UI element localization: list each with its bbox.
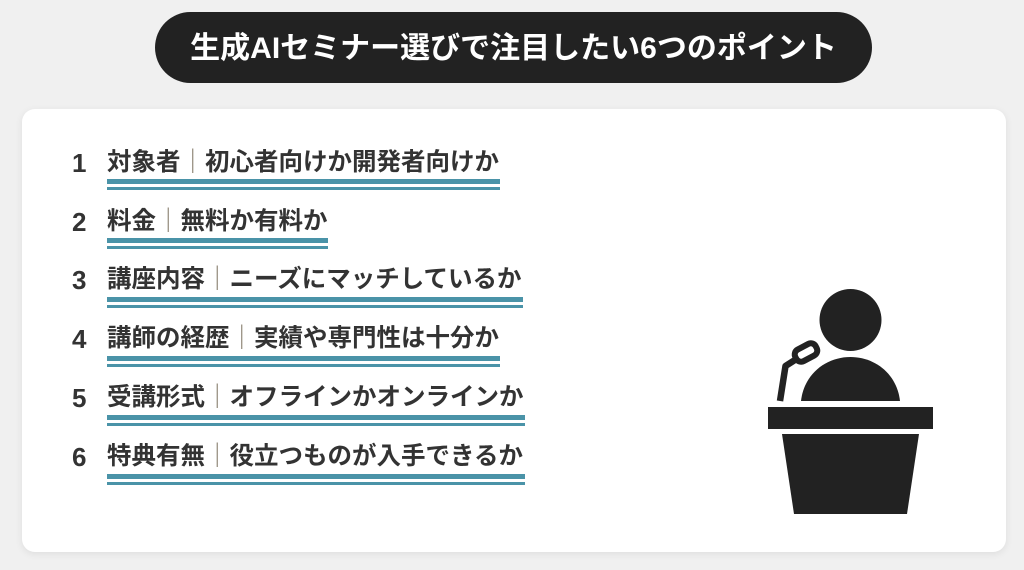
point 3 (72, 265, 523, 308)
title: 生成AIセミナー選びで注目したい6つのポイント (190, 32, 837, 65)
title (155, 12, 872, 83)
point 4 (72, 324, 500, 367)
point 5 (72, 383, 525, 426)
point 2: 料金｜無料か有料か (107, 208, 328, 235)
point 1 (72, 148, 500, 190)
point 5: 受講形式｜オフラインかオンラインか (107, 384, 524, 411)
point 6 (72, 442, 525, 485)
icon: speaker at podium (768, 289, 933, 514)
point 4: 講師の経歴｜実績や専門性は十分か (107, 325, 499, 352)
point 3: 講座内容｜ニーズにマッチしているか (107, 266, 522, 293)
point 5: 5 (72, 383, 86, 413)
point 2 (72, 207, 328, 249)
point 6: 特典有無｜役立つものが入手できるか (107, 443, 523, 470)
point 2: 2 (72, 207, 86, 237)
point 3: 3 (72, 265, 86, 295)
point 1: 1 (72, 148, 86, 178)
point 4: 4 (72, 324, 86, 354)
panel: checklist card (22, 109, 1006, 552)
point 6: 6 (72, 442, 86, 472)
point 1: 対象者｜初心者向けか開発者向けか (107, 149, 499, 176)
